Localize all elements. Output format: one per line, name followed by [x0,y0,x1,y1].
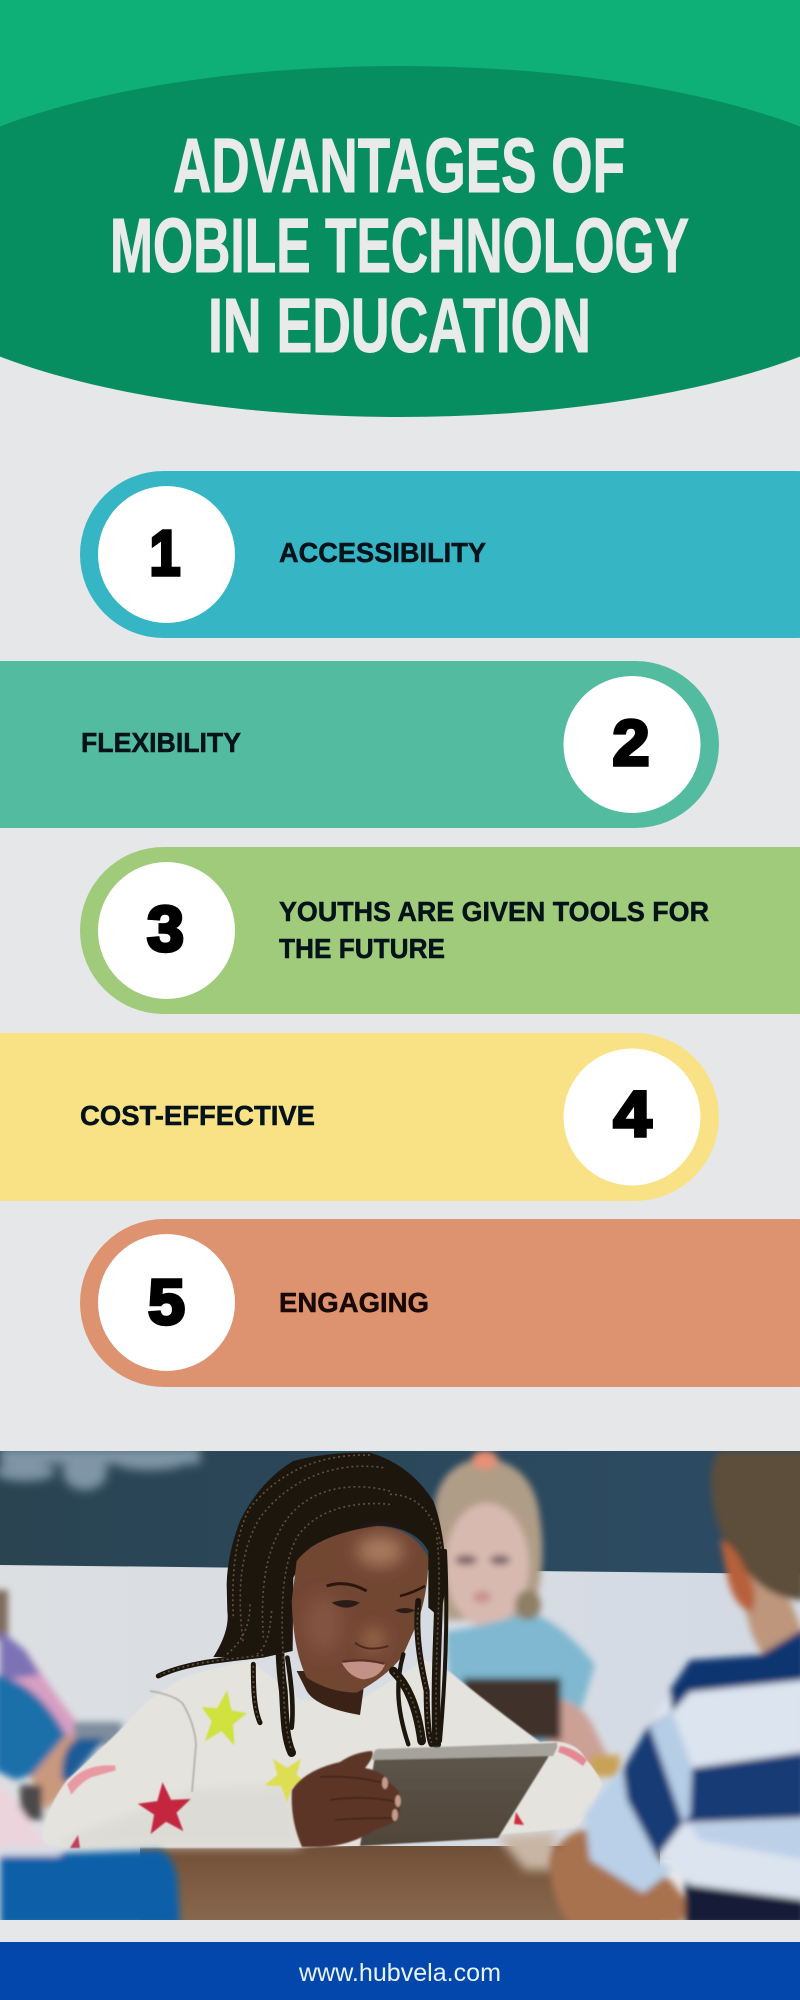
item 5: engaging [80,1219,800,1387]
item 3: tools for the future: YOUTHS ARE GIVEN TOOLS FOR [279,896,709,927]
tablet [360,1743,557,1846]
item 1: accessibility: 1 [150,517,180,589]
braids [158,1534,446,1753]
item 2: flexibility: 2 [612,707,650,779]
blackboard and wall [0,1448,800,1860]
item 5: engaging: ENGAGING [279,1287,429,1318]
item 3: tools for the future: THE FUTURE [279,933,445,964]
item 1: accessibility [80,471,800,638]
footer band [0,1942,800,2000]
hair mass [213,1453,447,1658]
hand [292,1751,401,1847]
title: IN EDUCATION [208,283,591,369]
blurred classmates on the left [0,1590,122,1858]
item 4: cost-effective [0,1033,719,1201]
photo: girl using a tablet in a classroom [0,1448,800,1926]
table [140,1832,660,1926]
nose shadow [355,1643,388,1649]
header ellipse [0,66,800,417]
girl's sweater [42,1660,602,1848]
lips [342,1661,385,1679]
blurred classmate in background [434,1451,620,1777]
eyebrows [327,1584,367,1591]
blue chair in foreground [0,1846,180,1925]
header band [0,0,800,250]
eyes [332,1600,360,1608]
item 2: flexibility: FLEXIBILITY [81,727,241,758]
braid highlights [160,1455,442,1751]
item 2: flexibility [0,661,719,828]
girl's head traced in local coordinates [158,1453,447,1753]
neck [297,1671,363,1715]
item 4: cost-effective: COST-EFFECTIVE [80,1100,315,1131]
footer website: www.hubvela.com [298,1959,501,1987]
item 1: accessibility: ACCESSIBILITY [279,537,486,568]
boy in foreground [550,1451,800,1925]
title [110,123,689,369]
item 4: cost-effective: 4 [614,1078,652,1150]
item 5: engaging: 5 [148,1266,185,1338]
item 3: tools for the future [80,847,800,1014]
face [292,1526,428,1693]
sweater stars [70,1687,587,1848]
item 3: tools for the future: 3 [147,893,184,965]
